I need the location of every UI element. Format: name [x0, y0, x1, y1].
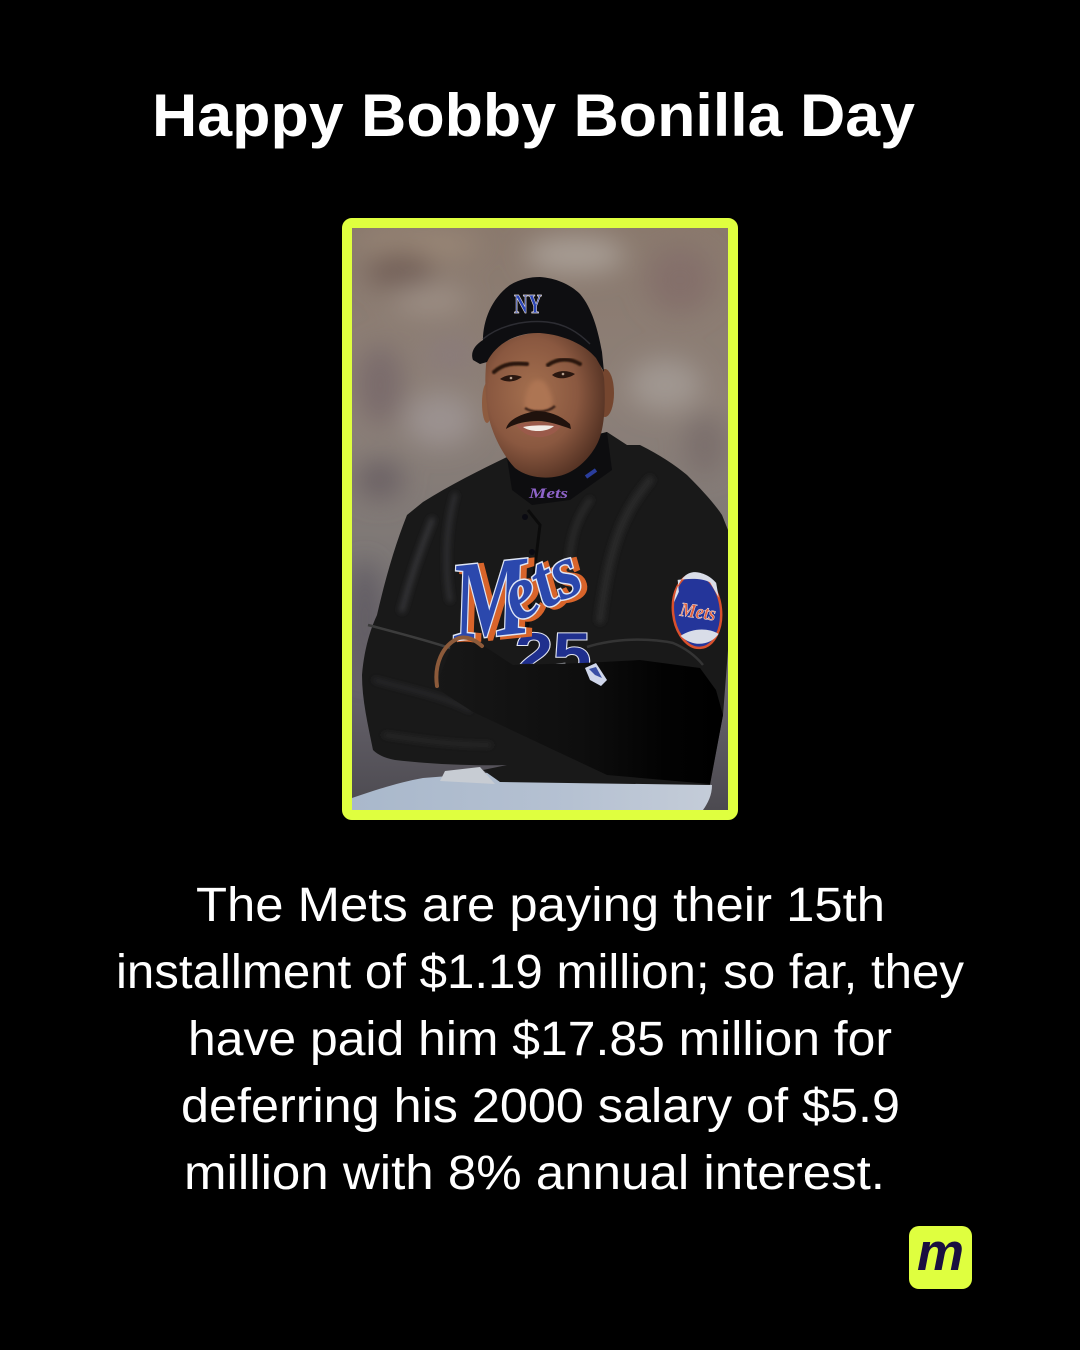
face	[485, 332, 605, 478]
crossed forearm	[437, 642, 723, 784]
mouth	[516, 422, 561, 437]
logo badge: m	[917, 1223, 964, 1282]
photo: portrait of Bobby Bonilla in a lime frame	[347, 223, 733, 815]
jersey torso	[362, 432, 728, 785]
moustache	[506, 411, 571, 429]
hand edge	[436, 637, 482, 686]
ears	[602, 369, 614, 417]
body text: deferring his 2000 salary of $5.9	[181, 1080, 900, 1133]
body text: installment of $1.19 million; so far, they	[116, 946, 964, 999]
body text: The Mets are paying their 15th	[196, 879, 885, 932]
body text: million with 8% annual interest.	[184, 1147, 885, 1200]
collar lettering: Mets	[528, 486, 568, 502]
shoulder patch	[672, 572, 722, 650]
sleeve seams	[368, 625, 450, 648]
lime frame	[347, 223, 733, 815]
body text	[116, 879, 964, 1200]
shoulder patch: Mets	[678, 599, 717, 626]
nose	[525, 380, 552, 410]
logo badge	[909, 1223, 972, 1289]
eyes	[500, 375, 522, 381]
portrait image	[351, 228, 728, 810]
Mets script	[452, 556, 588, 642]
Mets script: M	[448, 535, 543, 666]
Mets script: ets	[488, 528, 594, 637]
jersey number: 25	[515, 621, 591, 688]
cap NY logo: NY	[514, 289, 542, 319]
eyebrows	[494, 364, 527, 372]
pants	[352, 772, 712, 810]
jersey highlights	[375, 480, 650, 745]
title: Happy Bobby Bonilla Day	[152, 82, 916, 149]
cap	[472, 277, 604, 372]
sleeve logo	[585, 663, 607, 686]
Mets script: M	[443, 533, 538, 665]
jersey placket	[526, 510, 540, 640]
Mets script: ets	[493, 529, 599, 638]
body text: have paid him $17.85 million for	[188, 1013, 892, 1066]
neck and collar	[507, 432, 612, 505]
